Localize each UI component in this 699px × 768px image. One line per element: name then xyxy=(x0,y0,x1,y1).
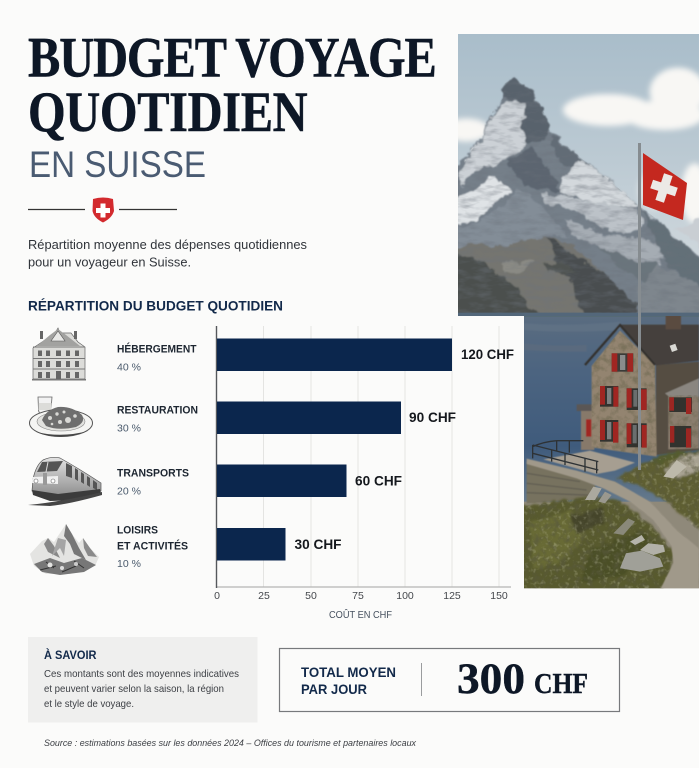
roof xyxy=(621,325,699,365)
icon: mountains xyxy=(30,524,99,575)
label: LOISIRS xyxy=(117,524,158,536)
intro text xyxy=(28,237,307,270)
label: 40 % xyxy=(117,362,141,374)
snow left face xyxy=(460,102,526,187)
axis tick labels: 100 xyxy=(396,590,414,602)
icon: Swiss shield xyxy=(92,198,114,222)
gravel path xyxy=(527,459,699,590)
chart heading: RÉPARTITION DU BUDGET QUOTIDIEN xyxy=(28,298,283,314)
panel: total moyen xyxy=(280,648,620,712)
axis tick labels: 0 xyxy=(214,590,220,602)
icon: hotel building xyxy=(32,328,86,380)
title: BUDGET VOYAGE xyxy=(28,27,437,89)
axis title: COÛT EN CHF xyxy=(329,608,392,621)
label: 20 % xyxy=(117,486,141,498)
stone texture xyxy=(586,332,699,482)
label xyxy=(117,468,189,498)
flag pole xyxy=(638,143,641,470)
panel covering under-chart photo edge xyxy=(458,316,524,588)
panel text: et peuvent varier selon la saison, la région xyxy=(44,683,224,695)
terrace xyxy=(543,451,635,474)
subtitle: EN SUISSE xyxy=(29,144,206,185)
category: hébergement xyxy=(32,328,197,380)
windows xyxy=(600,344,692,448)
total value xyxy=(457,656,588,703)
bar: transports xyxy=(217,464,402,497)
house right wall xyxy=(656,362,699,455)
annex xyxy=(581,408,594,450)
wing xyxy=(668,395,699,449)
axis tick labels: 25 xyxy=(258,590,270,602)
label: RESTAURATION xyxy=(117,404,198,416)
panel text: et le style de voyage. xyxy=(44,698,134,710)
category: restauration xyxy=(30,397,198,437)
right meadow xyxy=(617,450,699,532)
railing xyxy=(533,441,598,473)
panel text: Ces montants sont des moyennes indicatives xyxy=(44,668,239,680)
icon: Swiss flag xyxy=(643,153,687,220)
total label: TOTAL MOYEN xyxy=(301,664,396,680)
panel: à savoir xyxy=(28,637,258,722)
total label xyxy=(301,664,396,697)
divider with Swiss shield xyxy=(28,198,177,222)
photo: lake and stone house xyxy=(520,310,699,593)
icon: train xyxy=(28,457,102,506)
title: QUOTIDIEN xyxy=(28,81,308,144)
axis tick labels: 75 xyxy=(352,590,364,602)
bar chart xyxy=(214,326,514,621)
rocks xyxy=(620,551,663,572)
label: 30 % xyxy=(117,422,141,434)
bar: transports: 60 CHF xyxy=(355,472,402,488)
label: HÉBERGEMENT xyxy=(117,342,197,356)
bar: restauration: 90 CHF xyxy=(409,409,456,425)
lower-left meadow xyxy=(520,497,674,593)
axis tick labels xyxy=(214,590,508,602)
intro text: Répartition moyenne des dépenses quotidiennes xyxy=(28,237,307,252)
icon: plate and glass xyxy=(30,397,92,437)
source note: Source : estimations basées sur les données 2024 – Offices du tourisme et partenaires locaux xyxy=(44,738,417,749)
panel text xyxy=(44,668,239,710)
bar: loisirs xyxy=(217,528,342,560)
label: TRANSPORTS xyxy=(117,468,189,480)
rock strata texture xyxy=(458,82,663,312)
bar: hébergement: 120 CHF xyxy=(461,346,514,362)
retaining wall xyxy=(527,462,598,503)
label xyxy=(117,342,197,374)
label xyxy=(117,524,188,570)
bar: hébergement xyxy=(217,338,514,371)
title xyxy=(28,27,437,144)
bar: restauration xyxy=(217,402,456,434)
label xyxy=(117,404,198,434)
axis tick labels: 125 xyxy=(443,590,461,602)
axis tick labels: 150 xyxy=(490,590,508,602)
intro text: pour un voyageur en Suisse. xyxy=(28,254,191,270)
total label: PAR JOUR xyxy=(301,681,367,697)
category: loisirs xyxy=(30,524,188,575)
panel heading: À SAVOIR xyxy=(44,647,97,662)
label: ET ACTIVITÉS xyxy=(117,540,188,552)
meadow texture xyxy=(524,450,699,590)
photo: Matterhorn and Swiss flag xyxy=(443,34,699,323)
gable wall xyxy=(592,331,657,457)
bar: loisirs: 30 CHF xyxy=(294,536,342,552)
axis tick labels: 50 xyxy=(305,590,317,602)
label: 10 % xyxy=(117,558,141,570)
total value: CHF xyxy=(534,669,588,700)
total value: 300 xyxy=(457,656,525,703)
category: transports xyxy=(28,457,189,506)
